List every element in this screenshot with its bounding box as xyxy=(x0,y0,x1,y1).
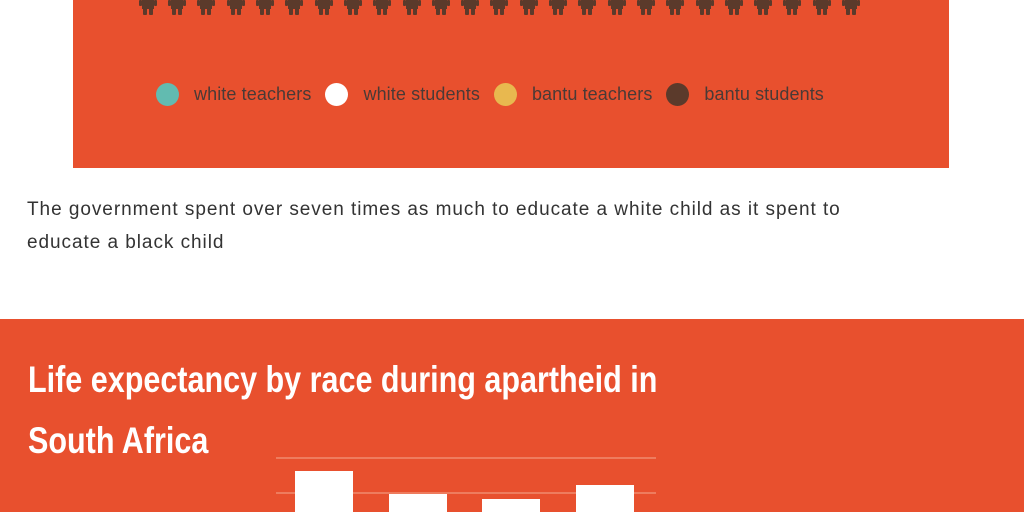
text block: spending: The government spent over seven times as much to educate a white child as it spent to xyxy=(27,199,841,220)
heading: Life expectancy by race during apartheid in xyxy=(28,359,657,400)
panel: education pictogram xyxy=(73,0,949,168)
text block: spending: educate a black child xyxy=(27,232,224,253)
heading: South Africa xyxy=(28,420,208,461)
bar chart xyxy=(276,457,656,512)
heading xyxy=(28,359,657,461)
text block: spending xyxy=(27,199,841,253)
pictogram row: bantu students xyxy=(139,0,860,15)
legend: white teachers white students bantu teachers bantu students xyxy=(194,84,824,104)
panel: life expectancy xyxy=(0,319,1024,512)
